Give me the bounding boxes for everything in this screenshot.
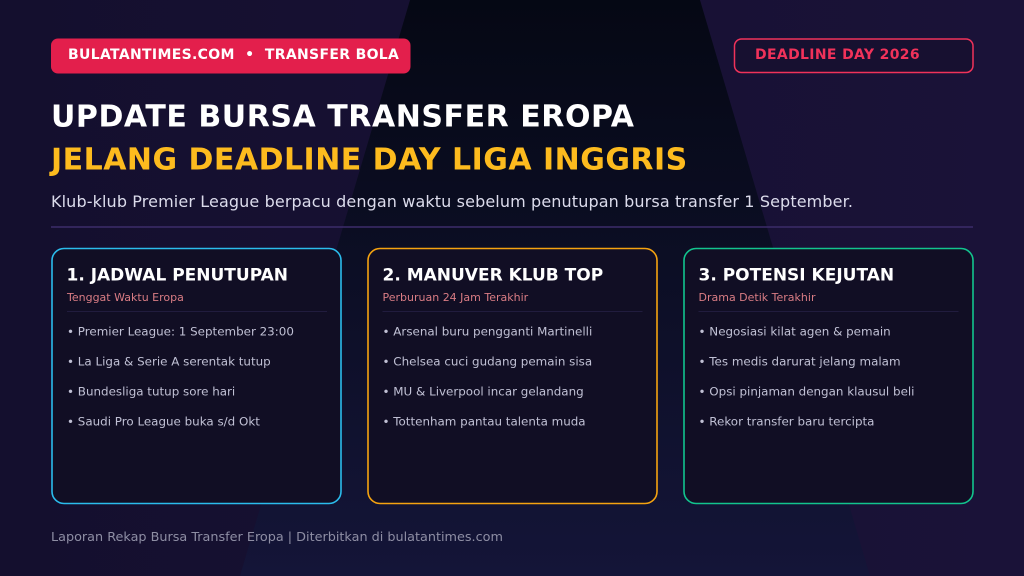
subheading: tenggat waktu: Tenggat Waktu Eropa	[66, 291, 184, 304]
heading: potensi kejutan: 3. POTENSI KEJUTAN	[698, 266, 894, 286]
heading: jadwal penutupan: 1. JADWAL PENUTUPAN	[66, 266, 288, 286]
panel: jadwal penutupan	[52, 248, 341, 504]
footer: Laporan Rekap Bursa Transfer Eropa | Diterbitkan di bulatantimes.com	[51, 530, 503, 545]
heading: manuver klub: 2. MANUVER KLUB TOP	[382, 266, 603, 286]
list: kejutan: • Negosiasi kilat agen & pemain	[698, 324, 891, 338]
title	[49, 100, 688, 178]
list: kejutan: • Opsi pinjaman dengan klausul beli	[698, 384, 914, 398]
list: manuver: • Tottenham pantau talenta muda	[382, 414, 586, 428]
title: JELANG DEADLINE DAY LIGA INGGRIS	[49, 142, 688, 178]
list: jadwal	[67, 324, 294, 428]
subheading: perburuan: Perburuan 24 Jam Terakhir	[382, 291, 529, 304]
list: jadwal: • Premier League: 1 September 23:00	[67, 324, 294, 338]
badge: site and category: BULATANTIMES.COM • TRANSFER BOLA	[68, 47, 399, 63]
list: kejutan	[698, 324, 914, 428]
badge: deadline day 2026	[734, 39, 973, 72]
subtitle: Klub-klub Premier League berpacu dengan waktu sebelum penutupan bursa transfer 1 September.	[51, 192, 853, 211]
subheading: drama: Drama Detik Terakhir	[698, 291, 816, 304]
badge: deadline day 2026: DEADLINE DAY 2026	[755, 47, 920, 63]
list: jadwal: • Saudi Pro League buka s/d Okt	[67, 414, 260, 428]
badge: site and category	[51, 38, 410, 74]
panel: manuver klub top	[368, 248, 657, 504]
list: manuver: • Arsenal buru pengganti Martinelli	[382, 324, 592, 338]
list: kejutan: • Tes medis darurat jelang malam	[698, 354, 901, 368]
list: jadwal: • Bundesliga tutup sore hari	[67, 384, 235, 398]
title: UPDATE BURSA TRANSFER EROPA	[51, 100, 635, 134]
list: manuver: • Chelsea cuci gudang pemain sisa	[382, 354, 592, 368]
list: manuver: • MU & Liverpool incar gelandang	[382, 384, 584, 398]
list: jadwal: • La Liga & Serie A serentak tutup	[67, 354, 271, 368]
list: kejutan: • Rekor transfer baru tercipta	[698, 414, 874, 428]
list: manuver	[382, 324, 592, 428]
panel: potensi kejutan	[684, 248, 973, 504]
